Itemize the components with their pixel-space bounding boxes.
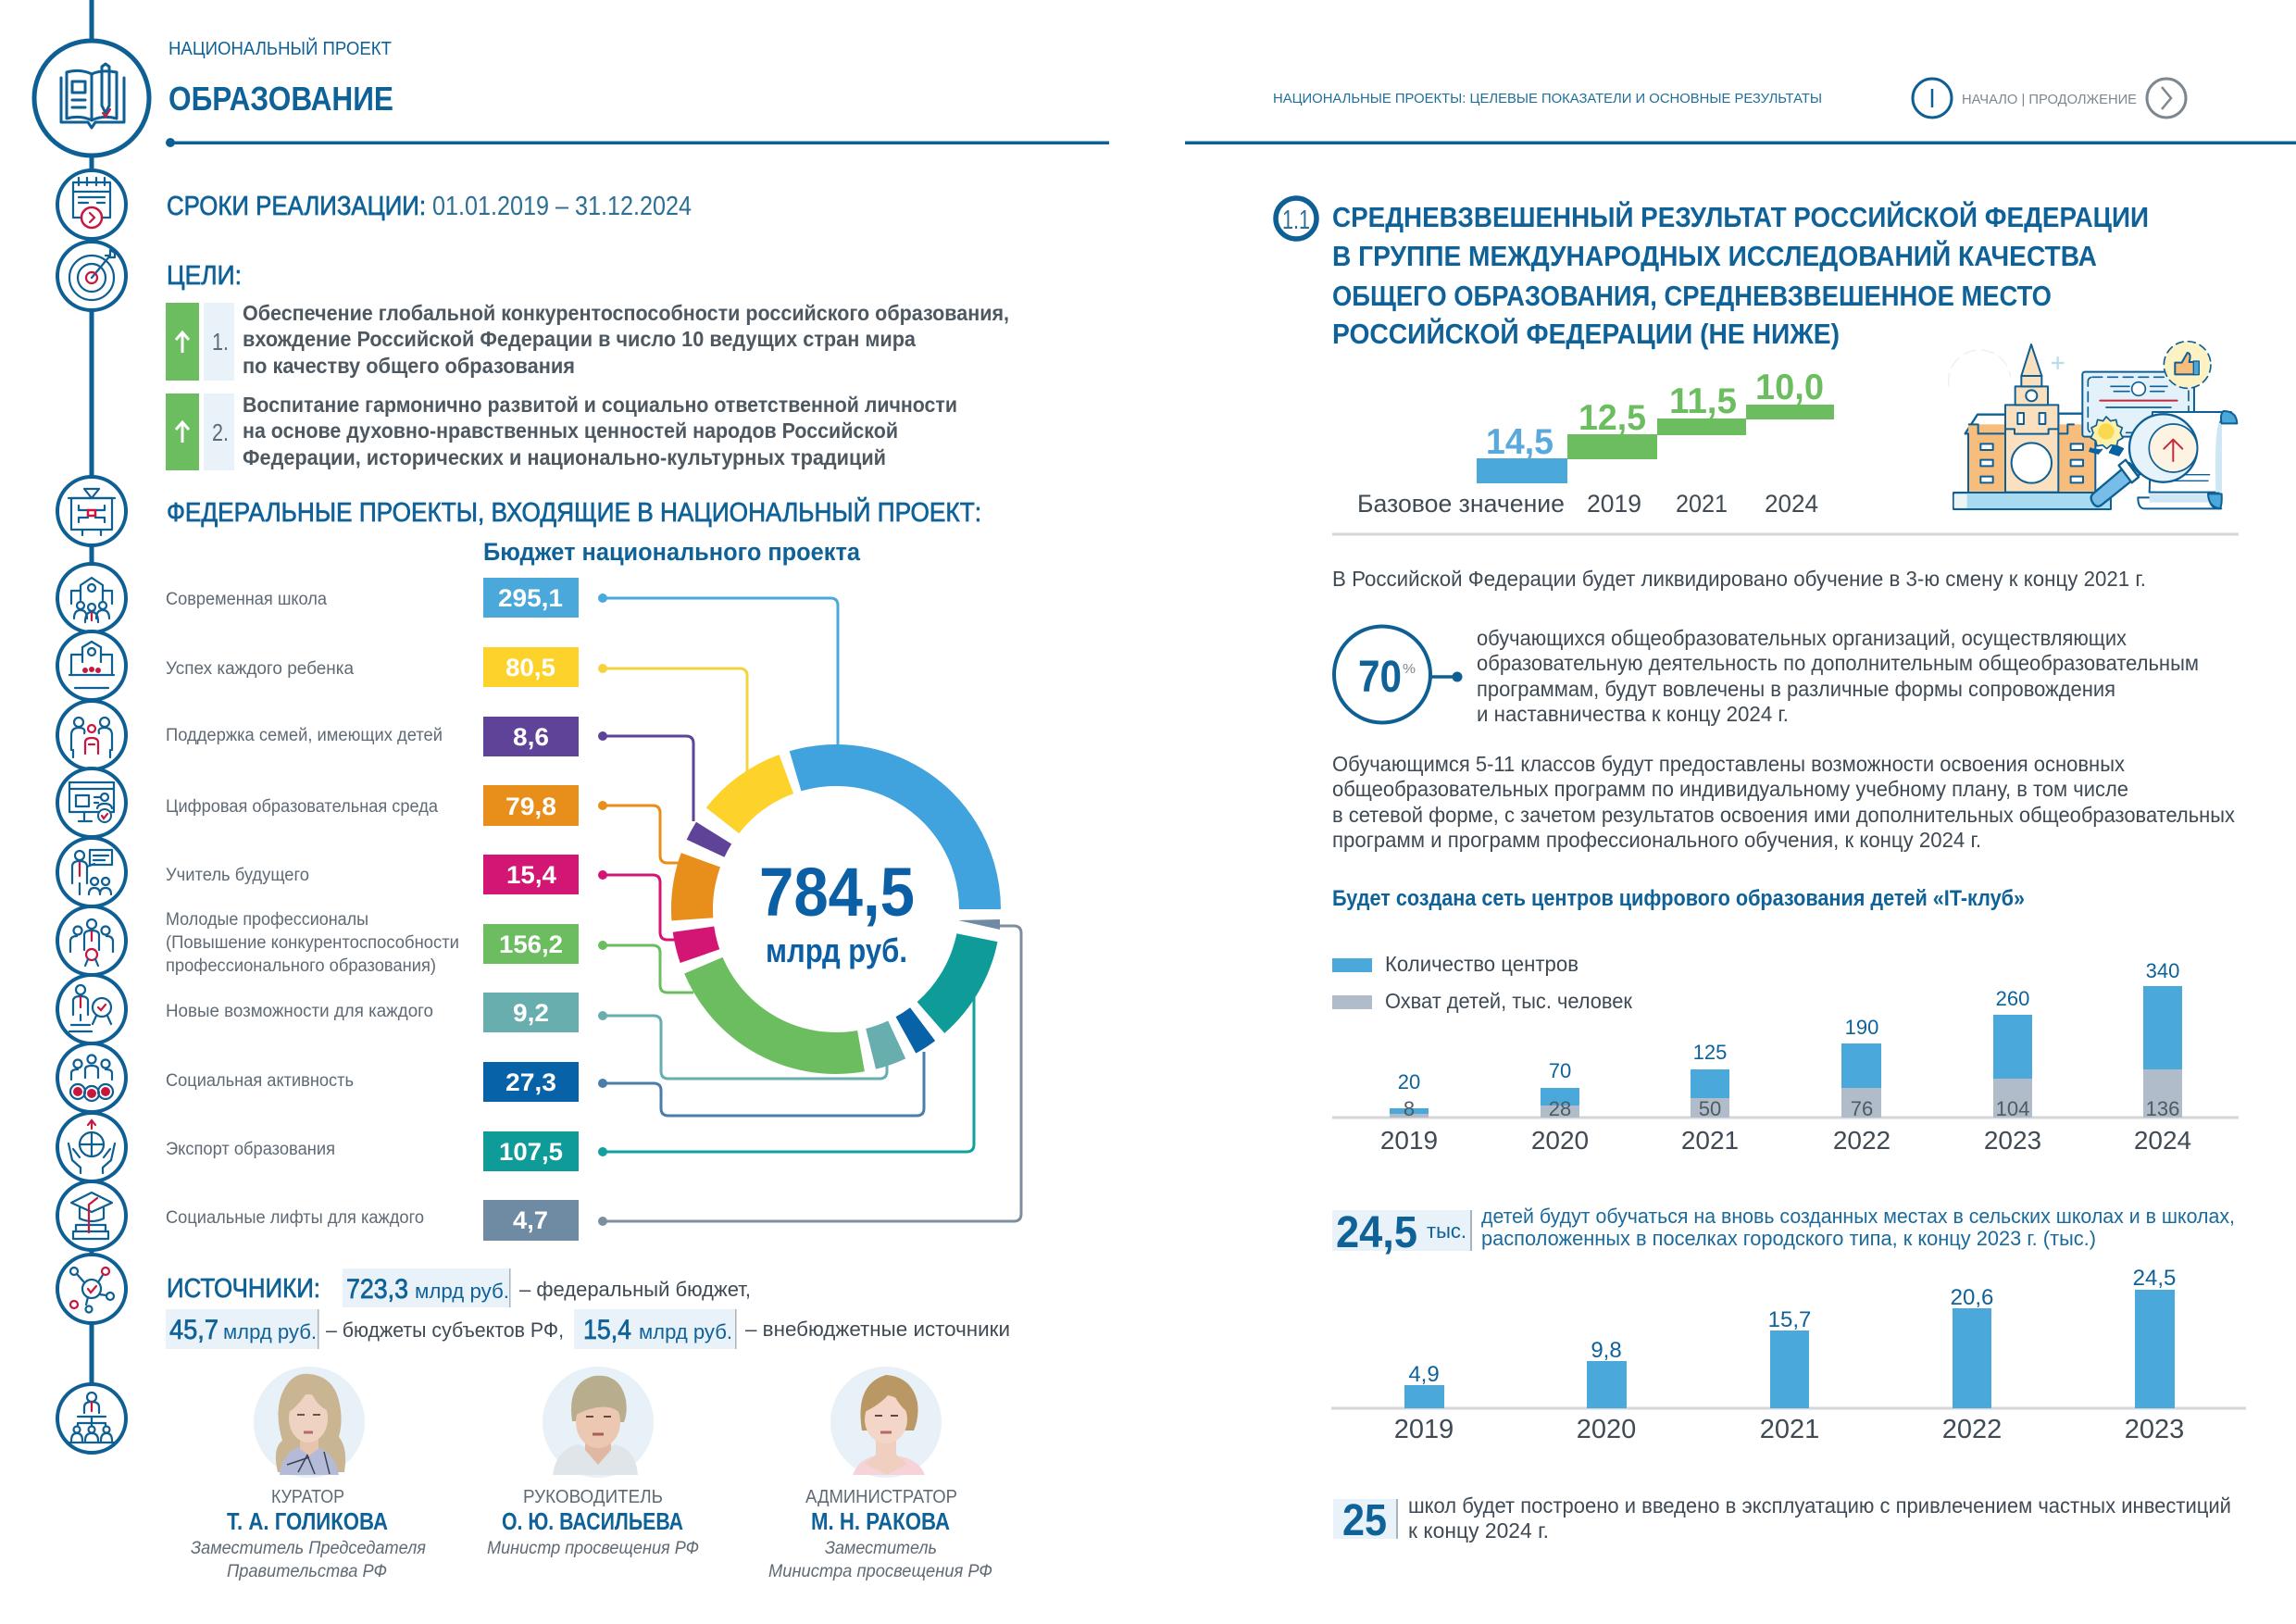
head caption: Министр просвещения РФ (487, 1539, 699, 1558)
goal 1 (166, 301, 1009, 381)
goal 2: на основе духовно-нравственных ценностей народов Российской (243, 418, 898, 443)
row: family support (166, 717, 579, 756)
row: family support: Поддержка семей, имеющих детей (166, 726, 443, 745)
row: modern school: 295,1 (498, 584, 563, 612)
bar chart: rural school places: 9,8 (1591, 1338, 1622, 1363)
implementation period (167, 192, 692, 221)
section heading: СРЕДНЕВЗВЕШЕННЫЙ РЕЗУЛЬТАТ РОССИЙСКОЙ ФЕДЕРАЦИИ (1332, 200, 2149, 233)
bar chart: IT-club centres: 2022 (1833, 1126, 1890, 1155)
25 schools callout: школ будет построено и введено в эксплуатацию с привлечением частных инвестиций (1408, 1493, 2231, 1518)
funding sources: – бюджеты субъектов РФ, (326, 1318, 564, 1342)
row: young professionals (166, 910, 579, 976)
row: digital environment (166, 785, 579, 826)
25 schools callout (1333, 1493, 2231, 1545)
individual plan paragraph: в сетевой форме, с зачетом результатов освоения ими дополнительных общеобразовательных (1332, 803, 2235, 827)
row: modern school: Современная школа (166, 590, 327, 609)
row: modern school (166, 578, 579, 618)
federal projects heading: ФЕДЕРАЛЬНЫЕ ПРОЕКТЫ, ВХОДЯЩИЕ В НАЦИОНАЛЬНЫЙ ПРОЕКТ: (167, 496, 981, 528)
individual plan paragraph: программ и программ профессионального обучения, к концу 2024 г. (1332, 828, 1981, 852)
step chart: 2024 (1765, 490, 1818, 518)
row: social lifts (166, 1200, 579, 1241)
icon: network (57, 1255, 126, 1323)
section heading: В ГРУППЕ МЕЖДУНАРОДНЫХ ИССЛЕДОВАНИЙ КАЧЕСТВА (1332, 239, 2097, 272)
goal 1: Обеспечение глобальной конкурентоспособности российского образования, (243, 301, 1009, 325)
icon: open book (34, 41, 149, 156)
bar chart: rural school places: 2023 (2125, 1415, 2184, 1444)
administrator caption: Министра просвещения РФ (768, 1562, 992, 1581)
step chart: 2021 (1676, 490, 1728, 518)
24.5 thousand callout: тыс. (1427, 1219, 1466, 1243)
step chart: Базовое значение (1357, 490, 1565, 518)
row: digital environment: 79,8 (505, 793, 556, 820)
icon: target (57, 242, 126, 310)
70 percent callout: 70 (1358, 653, 1402, 702)
24.5 thousand callout: расположенных в поселках городского типа, к концу 2023 г. (тыс.) (1481, 1227, 2096, 1250)
legend (1332, 952, 1633, 1013)
bar chart: IT-club centres: 136 (2146, 1097, 2179, 1120)
title: ОБРАЗОВАНИЕ (168, 80, 393, 118)
row: young professionals: Молодые профессионалы (166, 910, 368, 930)
goal 1: 1. (212, 328, 229, 356)
25 schools callout: 25 (1342, 1496, 1387, 1545)
row: social lifts: Социальные лифты для каждого (166, 1208, 424, 1228)
bar chart: rural school places: 15,7 (1768, 1307, 1811, 1332)
step chart: 14,5 (1486, 422, 1554, 462)
third shift statement: В Российской Федерации будет ликвидировано обучение в 3-ю смену к концу 2021 г. (1332, 567, 2146, 591)
implementation period: 01.01.2019 – 31.12.2024 (432, 192, 692, 221)
row: teacher of the future (166, 855, 579, 894)
70 percent callout (1334, 626, 2199, 726)
bar chart: IT-club centres: 28 (1549, 1097, 1571, 1120)
timeline spine (34, 0, 149, 1453)
bar chart: rural school places: 2019 (1394, 1415, 1454, 1444)
bar chart: IT-club centres: 260 (1996, 987, 2029, 1010)
funding sources: млрд руб. (223, 1320, 317, 1343)
step chart: 2019 (1587, 490, 1641, 518)
row: export of education: 107,5 (499, 1138, 563, 1166)
bar chart: rural school places (1331, 1266, 2246, 1444)
funding sources: ИСТОЧНИКИ: (167, 1274, 320, 1304)
icon: young professionals (57, 906, 126, 975)
goal 2 (166, 393, 957, 470)
24.5 thousand callout: 24,5 (1336, 1208, 1417, 1257)
header: national project kicker: НАЦИОНАЛЬНЫЙ ПРОЕКТ (168, 37, 392, 59)
donut total: 784,5 (759, 854, 915, 931)
administrator caption: Заместитель (825, 1539, 937, 1558)
goal 2: Воспитание гармонично развитой и социально ответственной личности (243, 393, 957, 417)
bar chart: IT-club centres: 2019 (1380, 1126, 1438, 1155)
row: export of education (166, 1131, 579, 1171)
legend: Охват детей, тыс. человек (1385, 989, 1633, 1013)
administrator caption: АДМИНИСТРАТОР (805, 1487, 957, 1507)
implementation period: СРОКИ РЕАЛИЗАЦИИ: (167, 192, 426, 221)
bar chart: IT-club centres: 2021 (1681, 1126, 1739, 1155)
running header: НАЦИОНАЛЬНЫЕ ПРОЕКТЫ: ЦЕЛЕВЫЕ ПОКАЗАТЕЛИ И ОСНОВНЫЕ РЕЗУЛЬТАТЫ (1273, 91, 1822, 106)
row: social lifts: 4,7 (513, 1206, 548, 1234)
icon: building with children (57, 631, 126, 700)
bar chart: IT-club centres: 50 (1699, 1097, 1721, 1120)
row: young professionals: (Повышение конкурентоспособности (166, 933, 459, 953)
donut total: млрд руб. (766, 931, 907, 969)
70 percent callout: программам, будут вовлечены в различные формы сопровождения (1477, 677, 2115, 701)
portrait: curator (254, 1367, 365, 1478)
70 percent callout: % (1403, 661, 1416, 677)
funding sources: млрд руб. (639, 1320, 732, 1343)
25 schools callout: к концу 2024 г. (1408, 1518, 1549, 1543)
24.5 thousand callout (1332, 1205, 2235, 1257)
section heading: РОССИЙСКОЙ ФЕДЕРАЦИИ (НЕ НИЖЕ) (1332, 317, 1840, 350)
bar chart: IT-club centres: 190 (1845, 1016, 1878, 1039)
pagination navigation: НАЧАЛО | ПРОДОЛЖЕНИЕ (1962, 92, 2137, 107)
bar chart: IT-club centres: 2024 (2134, 1126, 2191, 1155)
row: social activity: 27,3 (505, 1068, 556, 1096)
goal 2: 2. (212, 418, 229, 446)
curator caption: Заместитель Председателя (191, 1539, 426, 1558)
row: success of every child: 80,5 (505, 654, 555, 681)
connector lines (598, 593, 1021, 1226)
row: new opportunities: Новые возможности для каждого (166, 1002, 433, 1021)
icon: graduation cap and books (57, 1181, 126, 1250)
donut chart (634, 707, 1038, 1111)
donut total (759, 854, 915, 969)
administrator caption: М. Н. РАКОВА (811, 1507, 950, 1535)
step chart: 10,0 (1755, 368, 1824, 407)
step chart: 12,5 (1578, 398, 1646, 438)
70 percent callout: обучающихся общеобразовательных организаций, осуществляющих (1477, 626, 2127, 650)
bar chart: rural school places: 2020 (1577, 1415, 1636, 1444)
row: social activity (166, 1062, 579, 1102)
row: success of every child (166, 647, 579, 687)
bar chart: IT-club centres: 340 (2146, 959, 2179, 982)
goals heading: ЦЕЛИ: (167, 261, 242, 291)
row: success of every child: Успех каждого ребенка (166, 659, 354, 679)
divider under step chart (1332, 533, 2239, 535)
section heading (1332, 200, 2149, 350)
goal 1: вхождение Российской Федерации в число 10 ведущих стран мира (243, 327, 916, 351)
icon: person with award (57, 975, 126, 1043)
icon: family (57, 701, 126, 769)
curator caption (191, 1487, 426, 1581)
row: young professionals: 156,2 (499, 931, 563, 958)
budget heading: Бюджет национального проекта (483, 538, 861, 566)
funding sources: 723,3 (346, 1274, 408, 1305)
row: new opportunities: 9,2 (513, 999, 549, 1027)
curator caption: Т. А. ГОЛИКОВА (227, 1507, 388, 1535)
bar chart: IT-club centres: 20 (1398, 1070, 1420, 1093)
head caption: О. Ю. ВАСИЛЬЕВА (502, 1507, 683, 1535)
funding sources: – федеральный бюджет, (519, 1278, 751, 1301)
icon: hands and globe (57, 1113, 126, 1181)
icon: teacher (57, 838, 126, 906)
curator caption: КУРАТОР (271, 1487, 344, 1507)
funding sources: 45,7 (169, 1315, 218, 1345)
funding sources: – внебюджетные источники (745, 1318, 1010, 1341)
curator caption: Правительства РФ (227, 1562, 387, 1581)
step chart: 11,5 (1669, 381, 1737, 421)
bar chart: IT-club centres (1332, 959, 2239, 1155)
row: export of education: Экспорт образования (166, 1140, 335, 1159)
projects list (166, 578, 579, 1241)
row: digital environment: Цифровая образовательная среда (166, 797, 438, 817)
icon: digital monitor (57, 768, 126, 837)
bar chart: IT-club centres: 104 (1996, 1097, 2029, 1120)
bar chart: rural school places: 4,9 (1408, 1362, 1440, 1387)
70 percent callout: образовательную деятельность по дополнительным общеобразовательным (1477, 651, 2199, 675)
bar chart: rural school places: 2021 (1760, 1415, 1819, 1444)
bar chart: IT-club centres: 2023 (1984, 1126, 2041, 1155)
individual plan paragraph (1332, 752, 2235, 852)
row: teacher of the future: 15,4 (506, 861, 556, 889)
section number badge: 1.1 (1282, 206, 1310, 235)
icon: calendar (57, 170, 126, 239)
bar chart: IT-club centres: 76 (1851, 1097, 1873, 1120)
section number badge (1276, 198, 1316, 239)
section heading: ОБЩЕГО ОБРАЗОВАНИЯ, СРЕДНЕВЗВЕШЕННОЕ МЕСТО (1332, 280, 2052, 312)
icon: hierarchy (57, 1384, 126, 1453)
bar chart: IT-club centres: 70 (1549, 1059, 1571, 1082)
24.5 thousand callout: детей будут обучаться на вновь созданных местах в сельских школах и в школах, (1481, 1205, 2235, 1228)
portrait: head (543, 1367, 654, 1478)
individual plan paragraph: общеобразовательных программ по индивидуальному учебному плану, в том числе (1332, 777, 2128, 801)
icon: school (57, 564, 126, 632)
right page header rule (1185, 141, 2296, 144)
row: family support: 8,6 (513, 723, 549, 751)
row: social activity: Социальная активность (166, 1071, 354, 1091)
bar chart: rural school places: 20,6 (1951, 1285, 1993, 1310)
icon: social activity (57, 1043, 126, 1112)
IT-club heading: Будет создана сеть центров цифрового образования детей «IT-клуб» (1332, 886, 2025, 911)
row: teacher of the future: Учитель будущего (166, 866, 309, 885)
row: new opportunities (166, 993, 579, 1032)
bar chart: IT-club centres: 2020 (1531, 1126, 1589, 1155)
pagination navigation (1913, 79, 2186, 118)
portrait: administrator (830, 1367, 942, 1478)
row: young professionals: профессионального образования) (166, 956, 436, 976)
illustration: school, certificate and magnifier (1949, 342, 2237, 509)
bar chart: rural school places: 24,5 (2133, 1266, 2176, 1291)
70 percent callout: и наставничества к концу 2024 г. (1477, 702, 1789, 726)
head caption (487, 1487, 699, 1558)
bar chart: rural school places: 2022 (1942, 1415, 2002, 1444)
step chart (1357, 368, 1834, 518)
bar chart: IT-club centres: 125 (1693, 1041, 1727, 1064)
administrator caption (768, 1487, 992, 1581)
icon: project board (57, 477, 126, 545)
funding sources: млрд руб. (415, 1280, 509, 1303)
header rule left (166, 138, 1109, 147)
goal 1: по качеству общего образования (243, 354, 575, 378)
head caption: РУКОВОДИТЕЛЬ (523, 1487, 663, 1507)
individual plan paragraph: Обучающимся 5-11 классов будут предоставлены возможности освоения основных (1332, 752, 2125, 776)
funding sources: 15,4 (583, 1315, 631, 1345)
bar chart: IT-club centres: 8 (1404, 1097, 1415, 1120)
legend: Количество центров (1385, 952, 1578, 976)
funding sources (166, 1268, 1010, 1349)
goal 2: Федерации, исторических и национально-культурных традиций (243, 445, 886, 469)
